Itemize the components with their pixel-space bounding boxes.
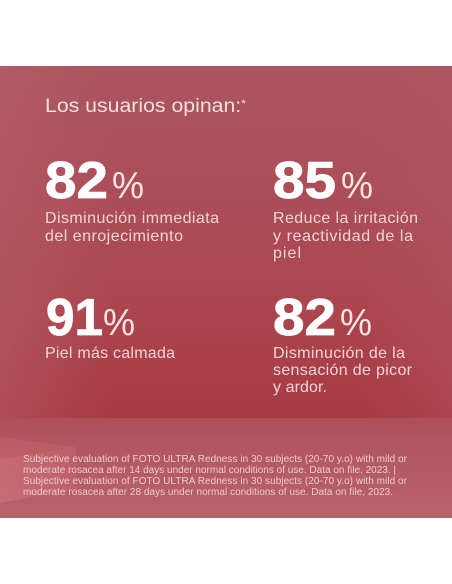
stat: 82% less itching and burning: sensación de picor <box>273 362 413 379</box>
stat: 85% reduces irritation: y reactividad de la <box>273 228 413 245</box>
stat: 85% reduces irritation: piel <box>273 245 301 262</box>
stat: 91% calmer skin: % <box>103 302 135 344</box>
stat: 82% immediate reduction <box>45 152 219 245</box>
stat: 82% less itching and burning: 82 <box>273 289 336 347</box>
stat: 82% immediate reduction: del enrojecimiento <box>45 228 183 245</box>
footnote: Subjective evaluation of FOTO ULTRA Redness in 30 subjects (20-70 y.o) with mild or <box>23 454 408 465</box>
stat: 82% less itching and burning <box>273 289 413 396</box>
footnote: moderate rosacea after 14 days under normal conditions of use. Data on file, 2023. | <box>23 465 396 476</box>
stat: 85% reduces irritation: 85 <box>273 152 336 210</box>
stat: 91% calmer skin: 91 <box>46 289 103 347</box>
stat: 82% immediate reduction: 82 <box>45 152 108 210</box>
stat: 85% reduces irritation <box>273 152 418 262</box>
stat: 85% reduces irritation: % <box>341 165 373 207</box>
stat: 85% reduces irritation: Reduce la irritación <box>273 210 418 227</box>
stat: 82% immediate reduction: % <box>112 165 144 207</box>
stat: 82% immediate reduction: Disminución immediata <box>45 210 219 227</box>
stat: 82% less itching and burning: % <box>340 302 372 344</box>
background panel <box>0 66 452 518</box>
stat: 82% less itching and burning: y ardor. <box>273 379 327 396</box>
title: * <box>241 98 247 110</box>
title: Los usuarios opinan: <box>45 96 220 117</box>
footnote: moderate rosacea after 28 days under normal conditions of use. Data on file, 2023. <box>23 487 393 498</box>
footnote: Subjective evaluation of FOTO ULTRA Redness in 30 subjects (20-70 y.o) with mild or <box>23 476 408 487</box>
stat: 91% calmer skin: Piel más calmada <box>45 345 175 362</box>
stat: 91% calmer skin <box>45 289 175 362</box>
stat: 82% less itching and burning: Disminución de la <box>273 345 405 362</box>
footnote <box>23 454 408 498</box>
